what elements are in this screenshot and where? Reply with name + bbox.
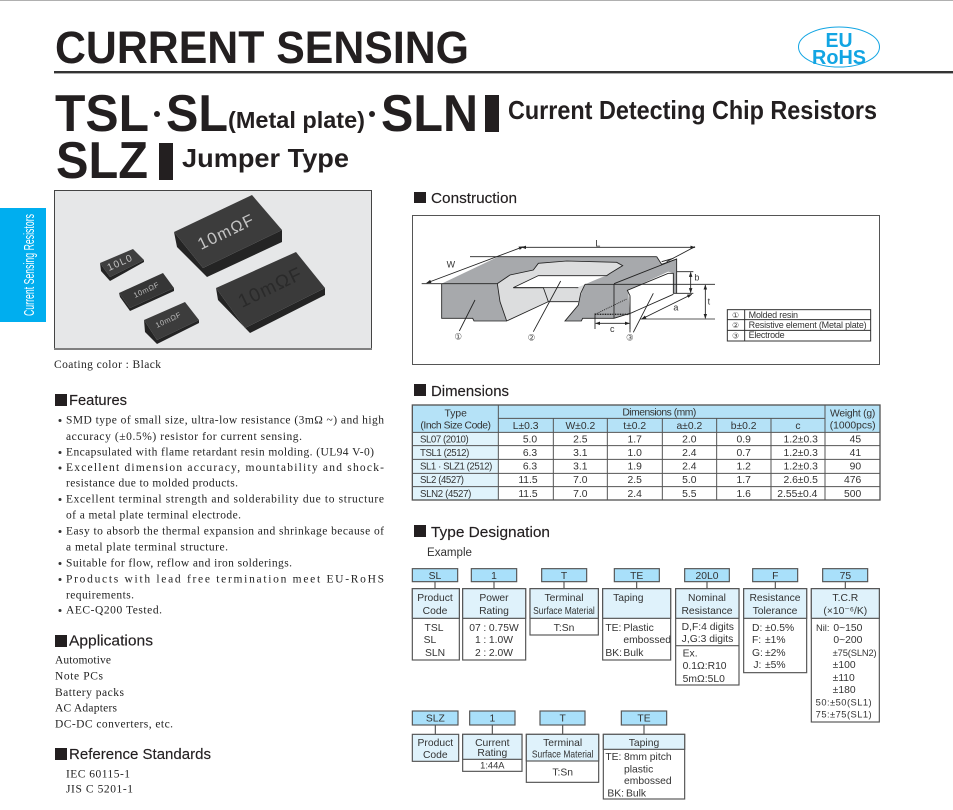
icon: EU RoHS badge bbox=[798, 27, 880, 69]
table: dimensions: Dimensions (mm) bbox=[622, 407, 696, 418]
table: dimensions: 1.7 bbox=[736, 475, 751, 486]
side tab: Current Sensing Resistors: Current Sensing Resistors bbox=[21, 214, 38, 316]
diagram: SL type designation: ±5% bbox=[765, 660, 786, 671]
heading: Applications: Applications bbox=[69, 633, 153, 650]
icon: EU RoHS badge: RoHS bbox=[812, 47, 866, 69]
diagram: SLZ type designation: Code bbox=[423, 750, 448, 761]
diagram: SL type designation: Bulk bbox=[623, 648, 644, 659]
diagram: SL type designation: T:Sn bbox=[554, 623, 575, 634]
photo: chip resistors: 10mΩF bbox=[235, 264, 305, 313]
photo: chip resistors: 10L0 bbox=[106, 253, 134, 274]
table: dimensions: 5.5 bbox=[682, 489, 697, 500]
panel: construction diagram: ① bbox=[454, 333, 462, 343]
text block: features list: Easy to absorb the thermal expansion and shrinkage because of bbox=[66, 526, 384, 538]
diagram: SL type designation: J,G:3 digits bbox=[682, 634, 733, 645]
diagram: SLZ type designation: Terminal bbox=[543, 738, 582, 749]
panel: construction diagram: W bbox=[447, 260, 456, 270]
panel: construction diagram: ① bbox=[732, 311, 739, 320]
diagram: SL type designation: 20L0 bbox=[696, 571, 719, 582]
text block: features list: Excellent terminal strength and solderability due to structure bbox=[66, 494, 384, 506]
panel: construction diagram: ② bbox=[732, 321, 739, 330]
diagram: SL type designation: Resistance bbox=[749, 593, 801, 604]
diagram: SL type designation: 1:1.0W bbox=[475, 635, 513, 646]
text block: applications list: DC-DC converters, etc. bbox=[55, 719, 173, 731]
diagram: SLZ type designation bbox=[412, 711, 685, 800]
icon: EU RoHS badge: EU bbox=[826, 30, 852, 52]
heading: SLZ Jumper Type: Jumper Type bbox=[182, 143, 349, 173]
text block: reference standards bbox=[66, 769, 133, 796]
diagram: SL type designation: BK: bbox=[605, 648, 622, 659]
table: dimensions: SL1 · SLZ1 (2512) bbox=[420, 461, 492, 472]
table: dimensions: 2.4 bbox=[627, 489, 642, 500]
diagram: SL type designation: D: bbox=[752, 623, 762, 634]
table: dimensions: 1.6 bbox=[736, 489, 751, 500]
table: dimensions: 2.6±0.5 bbox=[783, 475, 818, 486]
table: dimensions bbox=[412, 405, 880, 500]
heading: product series TSL SL SLN: TSL bbox=[55, 85, 149, 143]
text block: features list: a metal plate terminal structure. bbox=[66, 542, 228, 554]
caption: coating color: Coating color : Black bbox=[54, 359, 161, 371]
table: dimensions: SL07 (2010) bbox=[420, 434, 469, 445]
table: dimensions: 1.9 bbox=[627, 461, 642, 472]
heading: product series TSL SL SLN: SLN bbox=[381, 85, 478, 143]
heading: Reference Standards: Reference Standards bbox=[69, 746, 211, 763]
table: dimensions: 0.7 bbox=[736, 448, 751, 459]
table: dimensions: 2.55±0.4 bbox=[777, 489, 818, 500]
diagram: SLZ type designation: Taping bbox=[629, 738, 659, 749]
table: dimensions: Weight (g) bbox=[830, 409, 875, 420]
side tab: Current Sensing Resistors bbox=[0, 208, 46, 322]
photo: chip resistors: 10mΩF bbox=[132, 280, 161, 300]
diagram: SL type designation: (×10⁻⁶/K) bbox=[823, 606, 867, 617]
diagram: SL type designation: ±100 bbox=[833, 660, 856, 671]
diagram: SL type designation: Product bbox=[417, 593, 453, 604]
table: dimensions: W±0.2 bbox=[565, 421, 595, 432]
table: dimensions: 41 bbox=[850, 448, 861, 459]
heading: SLZ Jumper Type bbox=[56, 132, 349, 190]
table: dimensions: 11.5 bbox=[518, 489, 538, 500]
diagram: SL type designation: embossed bbox=[623, 635, 671, 646]
diagram: SL type designation: T bbox=[561, 571, 568, 582]
heading: product series TSL SL SLN bbox=[55, 85, 877, 143]
table: dimensions: 1.7 bbox=[627, 434, 642, 445]
diagram: SLZ type designation: 1 bbox=[489, 714, 495, 725]
table: dimensions: 2.4 bbox=[682, 461, 697, 472]
text block: features list: AEC-Q200 Tested. bbox=[66, 605, 162, 617]
diagram: SL type designation bbox=[412, 569, 879, 722]
table: dimensions: 1.2±0.3 bbox=[783, 461, 818, 472]
table: dimensions: c bbox=[795, 421, 801, 432]
diagram: SLZ type designation: SLZ bbox=[426, 714, 445, 725]
table: dimensions: 5.0 bbox=[523, 434, 537, 445]
diagram: SL type designation: ±1% bbox=[765, 635, 786, 646]
diagram: SLZ type designation: TE bbox=[637, 714, 651, 725]
table: dimensions: Type bbox=[444, 409, 467, 420]
text block: applications list bbox=[55, 655, 173, 731]
panel: construction diagram: Resistive element (Metal plate) bbox=[749, 320, 867, 330]
diagram: SLZ type designation: BK: bbox=[607, 789, 624, 800]
diagram: SL type designation: 75:±75(SL1) bbox=[816, 710, 872, 720]
table: dimensions: t±0.2 bbox=[623, 421, 646, 432]
table: dimensions: 1.0 bbox=[627, 448, 642, 459]
diagram: SL type designation: 2:2.0W bbox=[475, 648, 513, 659]
panel: construction diagram bbox=[412, 216, 880, 364]
text block: features list: Products with lead free termination meet EU-RoHS bbox=[66, 574, 384, 586]
panel: construction diagram: L bbox=[595, 238, 600, 248]
table: dimensions: SLN2 (4527) bbox=[420, 489, 471, 500]
table: dimensions: TSL1 (2512) bbox=[420, 448, 469, 459]
panel: construction diagram: ③ bbox=[626, 333, 634, 343]
diagram: SL type designation: Terminal bbox=[544, 593, 584, 604]
table: dimensions: 45 bbox=[850, 434, 861, 445]
diagram: SL type designation: ±0.5% bbox=[765, 623, 794, 634]
panel: construction diagram: ② bbox=[528, 333, 535, 343]
heading: product series TSL SL SLN: SL bbox=[166, 85, 228, 143]
heading: Dimensions: Dimensions bbox=[431, 383, 509, 400]
heading: product series TSL SL SLN: (Metal plate) bbox=[228, 107, 365, 133]
table: dimensions: SL2 (4527) bbox=[420, 475, 464, 486]
panel: construction diagram: a bbox=[673, 302, 678, 312]
diagram: SL type designation: TE bbox=[630, 571, 643, 582]
diagram: SLZ type designation: Product bbox=[418, 738, 453, 749]
label: Example: Example bbox=[427, 547, 472, 559]
diagram: SL type designation: 5mΩ:5L0 bbox=[683, 674, 725, 685]
diagram: SLZ type designation: plastic bbox=[624, 764, 653, 775]
diagram: SL type designation: Rating bbox=[479, 606, 509, 617]
photo: chip resistors: 10mΩF bbox=[154, 310, 183, 330]
table: dimensions: 7.0 bbox=[573, 475, 588, 486]
heading: Features: Features bbox=[69, 392, 127, 409]
text block: features list bbox=[58, 415, 384, 617]
diagram: SL type designation: F: bbox=[752, 635, 761, 646]
diagram: SLZ type designation: Surface Material bbox=[532, 750, 593, 761]
table: dimensions: 2.4 bbox=[682, 448, 697, 459]
text block: features list: Suitable for flow, reflow and iron solderings. bbox=[66, 558, 292, 570]
diagram: SL type designation: Tolerance bbox=[753, 606, 798, 617]
diagram: SLZ type designation: embossed bbox=[624, 776, 672, 787]
table: dimensions: 6.3 bbox=[523, 448, 537, 459]
diagram: SL type designation: Resistance bbox=[681, 606, 733, 617]
diagram: SL type designation: TSL bbox=[425, 623, 444, 634]
table: dimensions: 3.1 bbox=[573, 461, 588, 472]
text block: applications list: Battery packs bbox=[55, 687, 125, 699]
text block: features list: resistance due to molded products. bbox=[66, 478, 238, 490]
diagram: SLZ type designation: 1:44A bbox=[480, 761, 505, 771]
diagram: SLZ type designation: 8mm pitch bbox=[624, 752, 672, 763]
diagram: SL type designation: J: bbox=[753, 660, 761, 671]
diagram: SL type designation: Surface Material bbox=[533, 606, 595, 617]
diagram: SL type designation: G: bbox=[752, 648, 763, 659]
diagram: SL type designation: 07:0.75W bbox=[469, 623, 519, 634]
text block: applications list: AC Adapters bbox=[55, 703, 118, 715]
header rule bbox=[54, 71, 953, 73]
table: dimensions: 1.2±0.3 bbox=[783, 434, 818, 445]
table: dimensions: 6.3 bbox=[523, 461, 537, 472]
text block: applications list: Note PCs bbox=[55, 670, 104, 682]
text block: features list: of a metal plate terminal electrode. bbox=[66, 509, 241, 521]
diagram: SL type designation: 75 bbox=[840, 571, 851, 582]
diagram: SL type designation: ±75(SLN2) bbox=[833, 648, 877, 658]
diagram: SL type designation: Nil: bbox=[816, 623, 829, 633]
table: dimensions: 11.5 bbox=[518, 475, 538, 486]
diagram: SL type designation: SL bbox=[429, 571, 442, 582]
heading: product series TSL SL SLN: Current Detecting Chip Resistors bbox=[508, 95, 877, 125]
text block: applications list: Automotive bbox=[55, 655, 111, 667]
table: dimensions: 90 bbox=[850, 461, 861, 472]
diagram: SLZ type designation: Rating bbox=[477, 748, 508, 759]
diagram: SL type designation: F bbox=[772, 571, 778, 582]
panel: construction diagram: c bbox=[610, 324, 615, 334]
table: dimensions: 2.0 bbox=[682, 434, 697, 445]
diagram: SLZ type designation: T:Sn bbox=[552, 768, 573, 779]
table: dimensions: 2.5 bbox=[573, 434, 588, 445]
panel: construction diagram: Electrode bbox=[749, 330, 785, 340]
diagram: SL type designation: SL bbox=[424, 635, 437, 646]
diagram: SLZ type designation: Bulk bbox=[626, 789, 647, 800]
diagram: SL type designation: ±2% bbox=[765, 648, 786, 659]
diagram: SL type designation: SLN bbox=[425, 648, 445, 659]
text block: features list: Encapsulated with flame retardant resin molding. (UL94 V-0) bbox=[66, 447, 374, 459]
table: dimensions: 500 bbox=[844, 489, 862, 500]
table: dimensions: 0.9 bbox=[736, 434, 751, 445]
table: dimensions: 2.5 bbox=[627, 475, 642, 486]
text block: features list: Excellent dimension accuracy, mountability and shock- bbox=[66, 462, 384, 474]
text block: features list: requirements. bbox=[66, 589, 134, 601]
title: CURRENT SENSING: CURRENT SENSING bbox=[55, 22, 469, 73]
diagram: SLZ type designation: Current bbox=[475, 738, 510, 749]
text block: reference standards: JIS C 5201-1 bbox=[66, 784, 133, 796]
table: dimensions: 1.2 bbox=[736, 461, 751, 472]
diagram: SL type designation: Taping bbox=[613, 593, 644, 604]
panel: construction diagram: t bbox=[708, 297, 711, 307]
table: dimensions: L±0.3 bbox=[513, 421, 539, 432]
diagram: SL type designation: TE: bbox=[605, 623, 621, 634]
panel: construction diagram: Molded resin bbox=[749, 310, 798, 320]
diagram: SL type designation: 50:±50(SL1) bbox=[816, 697, 872, 707]
diagram: SL type designation: Nominal bbox=[688, 593, 726, 604]
table: dimensions: a±0.2 bbox=[676, 421, 702, 432]
diagram: SL type designation: Ex. bbox=[683, 649, 698, 660]
diagram: SL type designation: 1 bbox=[491, 571, 497, 582]
table: dimensions: 476 bbox=[844, 475, 862, 486]
heading: SLZ Jumper Type: SLZ bbox=[56, 132, 148, 190]
text block: reference standards: IEC 60115-1 bbox=[66, 769, 130, 781]
diagram: SL type designation: 0.1Ω:R10 bbox=[683, 661, 727, 672]
table: dimensions: b±0.2 bbox=[731, 421, 757, 432]
heading: Construction: Construction bbox=[431, 190, 517, 207]
panel: construction diagram: ③ bbox=[732, 331, 739, 340]
panel: construction diagram: b bbox=[694, 273, 699, 283]
text block: features list: accuracy (±0.5%) resistor for current sensing. bbox=[66, 431, 302, 443]
photo: chip resistors: 10mΩF bbox=[195, 211, 257, 254]
table: dimensions: 1.2±0.3 bbox=[783, 448, 818, 459]
diagram: SL type designation: 0~150 bbox=[833, 623, 863, 634]
table: dimensions: (Inch Size Code) bbox=[420, 420, 491, 431]
diagram: SL type designation: 0~200 bbox=[833, 635, 863, 646]
diagram: SL type designation: ±180 bbox=[833, 685, 856, 696]
diagram: SLZ type designation: TE: bbox=[605, 752, 621, 763]
diagram: SL type designation: T.C.R bbox=[832, 593, 858, 604]
diagram: SLZ type designation: T bbox=[560, 714, 567, 725]
table: dimensions: 7.0 bbox=[573, 489, 588, 500]
diagram: SL type designation: Code bbox=[423, 606, 448, 617]
diagram: SL type designation: ±110 bbox=[833, 673, 855, 684]
heading: Type Designation: Type Designation bbox=[431, 524, 550, 541]
text block: features list: SMD type of small size, ultra-low resistance (3mΩ ~) and high bbox=[66, 415, 384, 427]
diagram: SL type designation: Power bbox=[479, 593, 509, 604]
diagram: SL type designation: Plastic bbox=[623, 623, 654, 634]
table: dimensions: (1000pcs) bbox=[830, 420, 876, 431]
diagram: SL type designation: D,F:4 digits bbox=[682, 622, 734, 633]
table: dimensions: 3.1 bbox=[573, 448, 588, 459]
photo: chip resistors bbox=[54, 190, 372, 350]
table: dimensions: 5.0 bbox=[682, 475, 697, 486]
